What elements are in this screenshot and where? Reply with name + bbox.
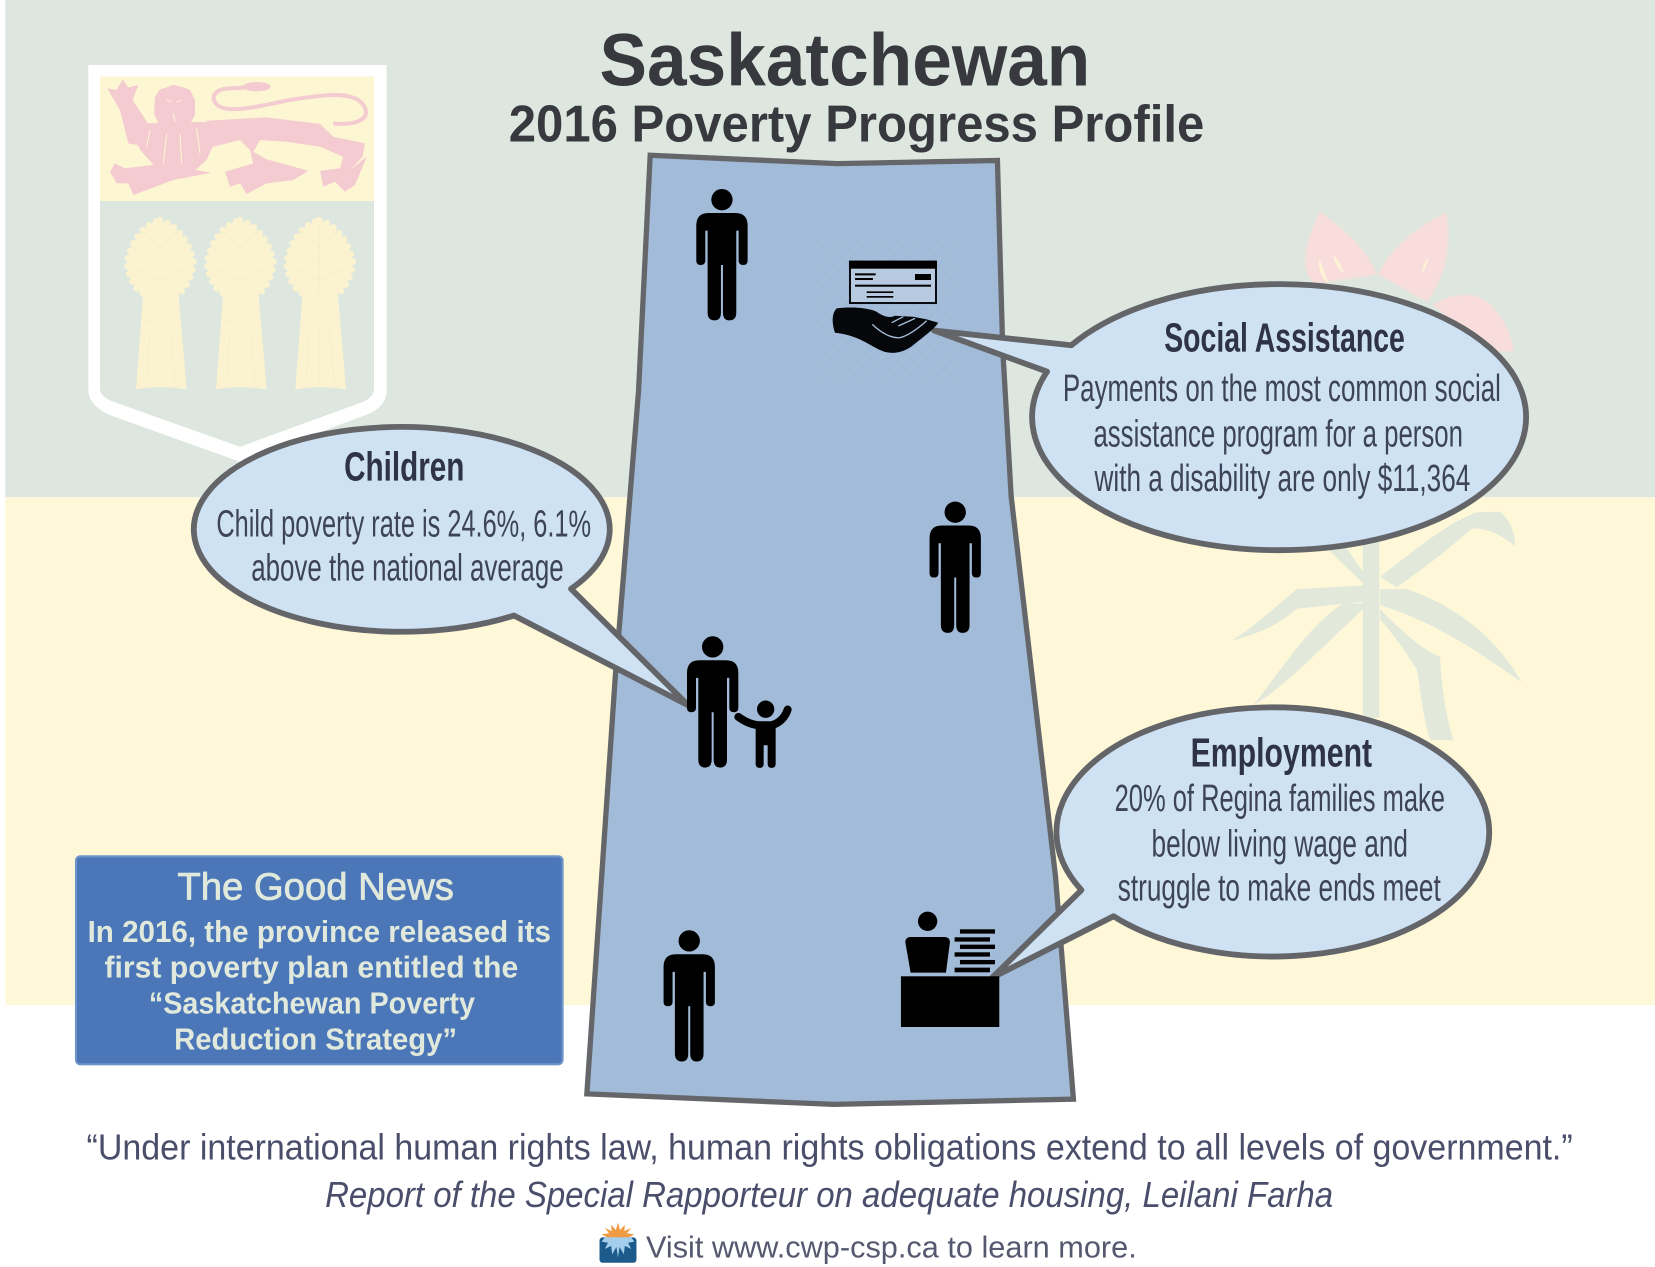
icon: CWP logo — [600, 1223, 636, 1263]
icon: adult and child holding hands — [687, 636, 788, 768]
good news heading: The Good News — [177, 867, 454, 909]
background: yellow flag band — [5, 497, 1655, 1005]
good news text: first poverty plan entitled the — [104, 951, 518, 985]
lion — [107, 79, 367, 195]
good news text: Reduction Strategy” — [174, 1022, 457, 1056]
callout: employment — [992, 707, 1489, 978]
subtitle: 2016 Poverty Progress Profile — [509, 94, 1204, 152]
social assistance text: assistance program for a person — [1093, 414, 1463, 456]
social assistance text — [1063, 368, 1501, 500]
employment text — [1115, 778, 1445, 910]
icon: person centre-east — [930, 502, 981, 633]
callout: social assistance — [934, 284, 1526, 550]
icon: hand holding cheque — [833, 261, 938, 353]
social assistance text: with a disability are only $11,364 — [1094, 458, 1470, 500]
icon: worker at desk with papers — [901, 912, 999, 1027]
employment heading: Employment — [1191, 730, 1372, 776]
children text — [216, 503, 591, 590]
employment text: struggle to make ends meet — [1118, 868, 1441, 910]
children text: above the national average — [251, 548, 564, 590]
background: green flag band — [5, 0, 1655, 497]
quote attribution: Report of the Special Rapporteur on adequate housing, Leilani Farha — [325, 1175, 1333, 1215]
employment text: 20% of Regina families make — [1115, 778, 1445, 820]
coat of arms shield — [88, 65, 387, 462]
panel: the good news — [76, 856, 563, 1064]
callout: children — [194, 427, 688, 705]
title: Saskatchewan — [600, 19, 1090, 102]
children heading: Children — [344, 443, 464, 489]
children text: Child poverty rate is 24.6%, 6.1% — [216, 503, 591, 545]
good news text — [88, 915, 551, 1056]
wheat sheaves — [127, 220, 193, 389]
icon: person north — [696, 189, 748, 320]
footer link text: Visit www.cwp-csp.ca to learn more. — [646, 1230, 1137, 1264]
lily flower emblem — [1231, 211, 1522, 740]
quote: “Under international human rights law, human rights obligations extend to all levels of government.” — [87, 1127, 1573, 1167]
good news text: “Saskatchewan Poverty — [149, 987, 475, 1021]
social assistance heading: Social Assistance — [1164, 315, 1405, 361]
icon: person south — [664, 930, 715, 1062]
texture behind cheque icon — [817, 240, 957, 382]
good news text: In 2016, the province released its — [88, 915, 551, 949]
employment text: below living wage and — [1152, 823, 1408, 865]
province map of Saskatchewan — [587, 155, 1073, 1104]
